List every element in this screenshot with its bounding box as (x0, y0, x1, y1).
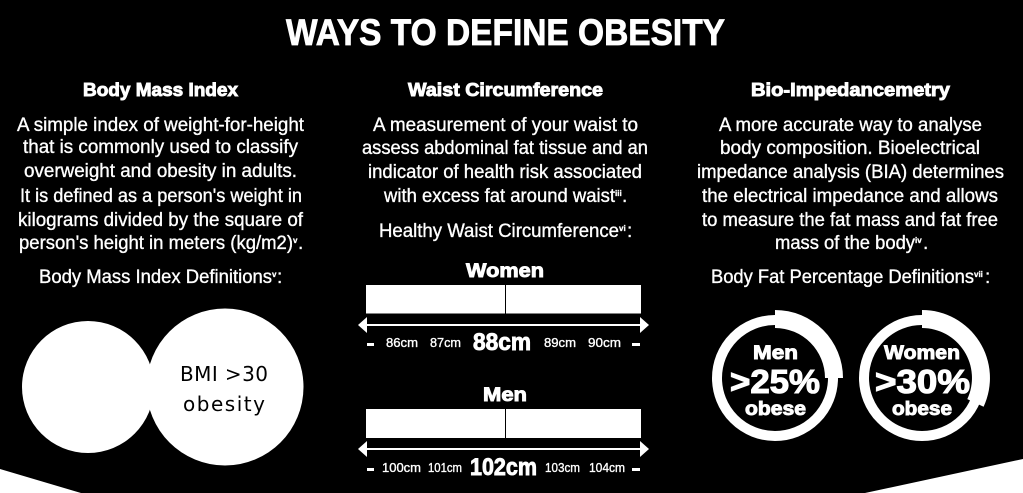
text block: BIA description: iv (915, 236, 922, 245)
text block: BIA description: A more accurate way to analyse (719, 115, 982, 136)
scale labels: women: 86cm (386, 335, 418, 350)
label: men: Men (753, 343, 798, 364)
text block: BMI description: person's height in meters (kg/m2) (19, 233, 293, 254)
heading: waist circumference: Waist Circumference (408, 80, 603, 100)
heading: body mass index: Body Mass Index (83, 80, 238, 100)
text block: BMI description: A simple index of weight-for-height (17, 115, 305, 136)
text block: BMI description: kilograms divided by the square of (18, 210, 304, 231)
bar: women (366, 285, 641, 314)
text block: BIA description: to measure the fat mass and fat free (702, 210, 998, 231)
panel: body mass index (17, 80, 305, 466)
text block: BMI description: overweight and obesity in adults. (24, 161, 297, 182)
bar: men (366, 409, 641, 438)
text block: BMI description: It is defined as a person's weight in (20, 186, 302, 207)
text block: healthy waist label: : (627, 221, 632, 242)
text block: BIA description (697, 115, 1004, 254)
arrow: men scale (358, 441, 649, 457)
arrow: women scale (358, 317, 649, 333)
text block: BIA description: body composition. Bioelectrical (720, 138, 980, 159)
label: BMI over 30 obesity: obesity (183, 392, 265, 416)
scale labels: men: 103cm (545, 460, 580, 475)
text block: waist description: iii (615, 189, 622, 198)
scale labels: men: 104cm (589, 460, 625, 475)
text block: BMI definitions label: Body Mass Index Definitions (39, 267, 272, 288)
scale labels: women: 90cm (588, 335, 621, 350)
label: women: Women (884, 343, 960, 364)
bottom right white corner (865, 459, 1023, 493)
scale labels: women: 87cm (430, 335, 461, 350)
text block: body fat definitions label: Body Fat Percentage Definitions (711, 267, 974, 288)
text block: waist description: with excess fat around waist (383, 186, 616, 207)
label: BMI over 30 obesity (180, 362, 268, 416)
text block: waist description (362, 115, 648, 207)
text block: BMI definitions label: : (277, 267, 282, 288)
panel: bio-impedancemetry (697, 80, 1004, 436)
chart: women waist scale (358, 261, 649, 356)
text block: BIA description: the electrical impedance and allows (702, 186, 998, 207)
heading: bio-impedancemetry: Bio-Impedancemetry (751, 80, 950, 100)
bottom left white corner (0, 469, 81, 493)
text block: BMI description: . (298, 233, 303, 254)
scale labels: men (367, 454, 640, 481)
value: over 30 percent: >30% (875, 363, 970, 400)
label: BMI over 30 obesity: BMI >30 (180, 362, 268, 386)
label: men: Men (483, 385, 527, 406)
scale labels: women: 89cm (544, 335, 576, 350)
text block: BMI description: v (293, 236, 298, 245)
text block: waist description: indicator of health risk associated (368, 162, 642, 183)
text block: BIA description: . (923, 233, 928, 254)
scale labels: women (367, 329, 640, 356)
title: WAYS TO DEFINE OBESITY (286, 12, 725, 53)
text block: waist description: assess abdominal fat tissue and an (362, 138, 648, 159)
text block: healthy waist label: Healthy Waist Circumference (379, 221, 619, 242)
scale labels: men: 101cm (428, 460, 462, 475)
text block: body fat definitions label: : (985, 267, 990, 288)
label: women: Women (466, 261, 544, 282)
text block: BIA description: mass of the body (775, 233, 915, 254)
text block: BMI description: that is commonly used to classify (23, 137, 298, 158)
scale labels: men: 100cm (382, 460, 421, 475)
text block: waist description: . (622, 186, 627, 207)
scale labels: men: 102cm (470, 454, 537, 481)
icon: BMI circles (22, 308, 304, 466)
value: over 25 percent: >25% (730, 363, 820, 400)
text block: BMI description (17, 115, 305, 254)
text block: waist description: A measurement of your waist to (373, 115, 638, 136)
text block: BMI definitions label: v (272, 270, 277, 279)
panel: waist circumference (358, 80, 649, 481)
scale labels: women: 88cm (473, 329, 531, 356)
chart: men waist scale (358, 385, 649, 481)
chart: men body fat ring (717, 310, 843, 436)
label: obese: obese (892, 399, 952, 420)
chart: women body fat ring (864, 310, 990, 436)
text block: BIA description: impedance analysis (BIA) determines (697, 162, 1004, 183)
label: obese: obese (745, 399, 806, 420)
text block: healthy waist label: vi (619, 224, 626, 233)
text block: body fat definitions label: vii (974, 270, 983, 279)
